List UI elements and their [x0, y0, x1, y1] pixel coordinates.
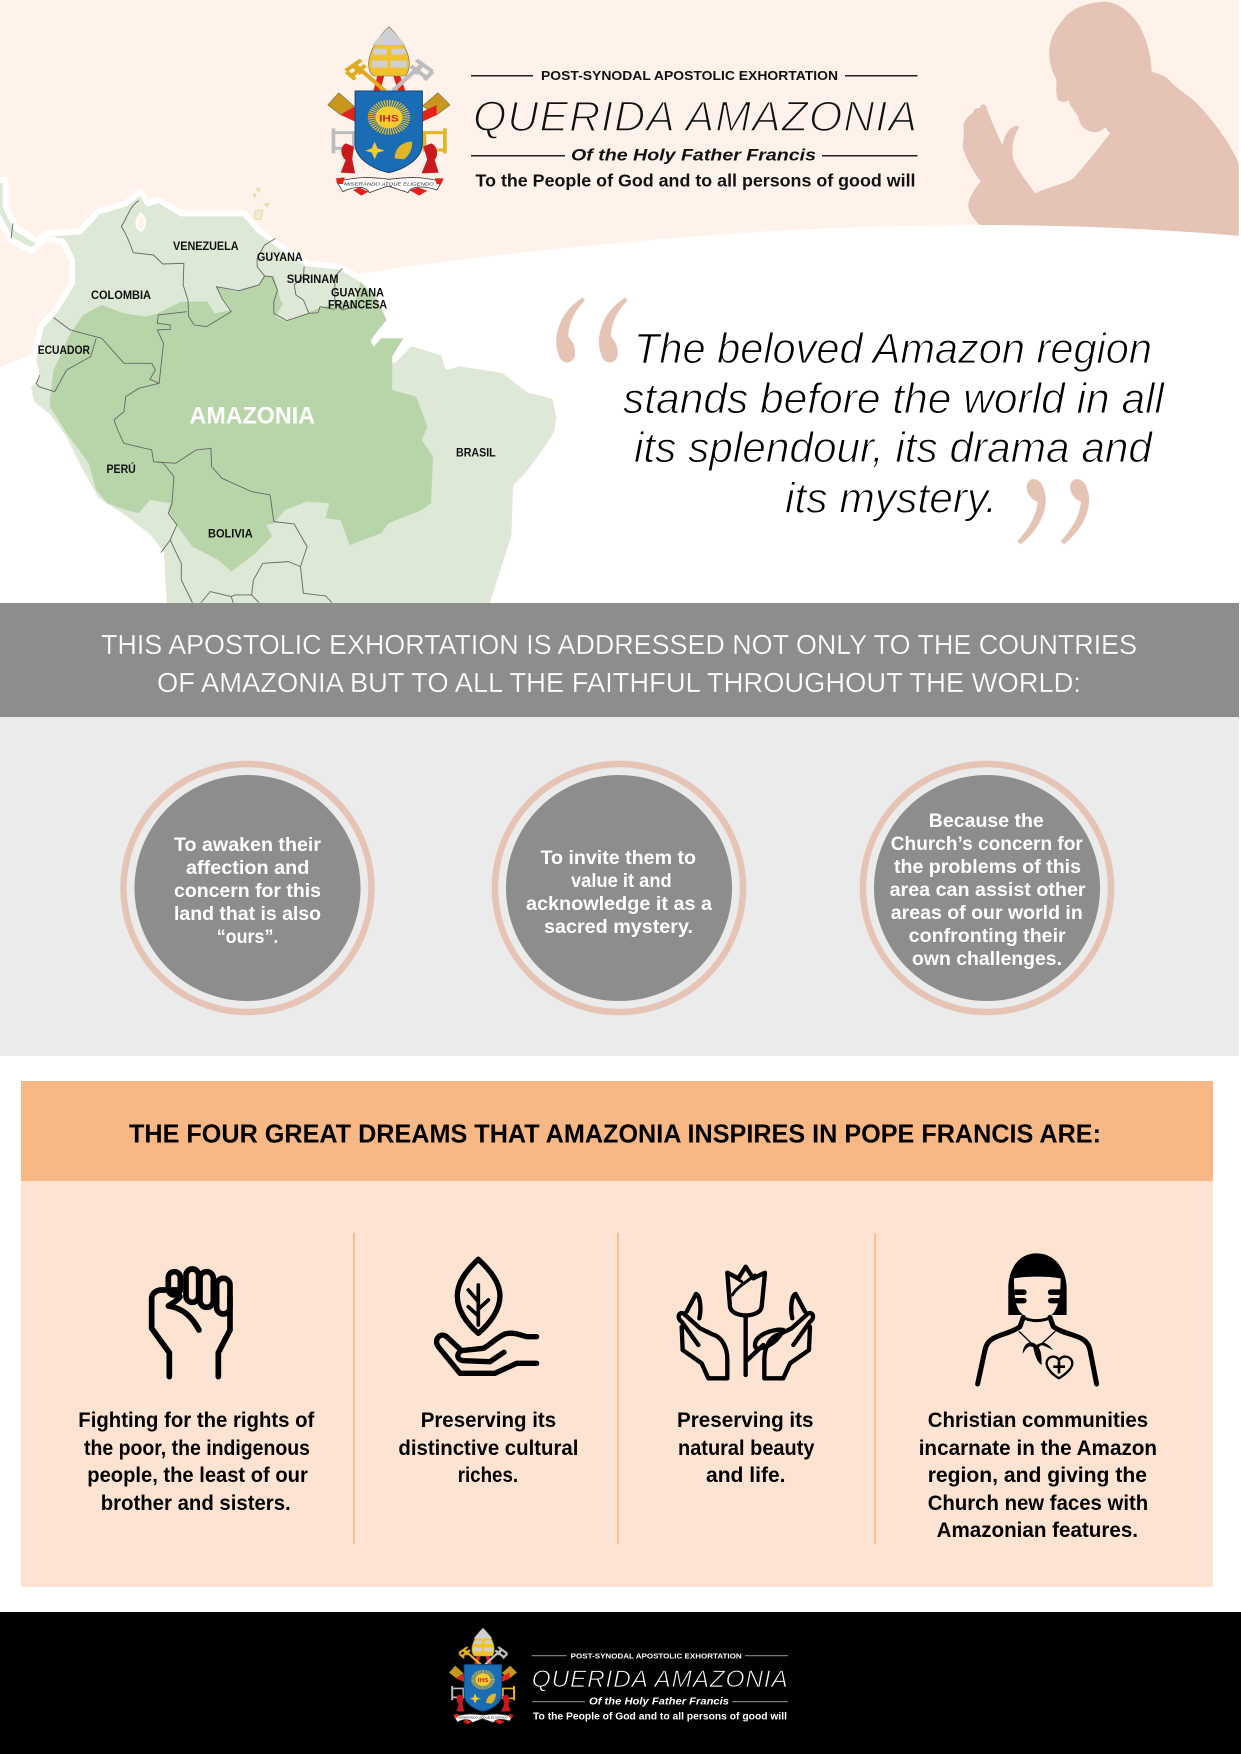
pope silhouette: [963, 2, 1239, 253]
map: islands: [253, 188, 269, 219]
panel: dreams: [21, 1181, 1213, 1587]
arms: gold key: [346, 60, 385, 91]
panel: reasons: [0, 717, 1239, 1056]
opening quotation mark: [556, 298, 628, 362]
dreams heading: [21, 1081, 1213, 1181]
footer title block: [532, 1651, 788, 1722]
arms: ribbons: [373, 75, 405, 91]
map labels: BOLIVIA: [208, 529, 253, 541]
circle: awaken affection: land that is also: [174, 903, 321, 925]
header title block: [471, 68, 918, 191]
footer band: [0, 1612, 1241, 1754]
circle: awaken affection: “ours”.: [217, 926, 278, 948]
dream text: rights of the poor: brother and sisters.: [101, 1491, 291, 1515]
map labels: SURINAM: [287, 274, 338, 286]
arms: silver cross: [333, 128, 354, 153]
circle: church concern: Because the: [929, 810, 1044, 832]
arms: gold cross: [424, 128, 445, 153]
arms: red tassels: [341, 143, 439, 173]
arms: tiara grey bands: [372, 27, 407, 68]
dream text: natural beauty: Preserving its: [677, 1408, 814, 1432]
dream text: cultural riches: [398, 1408, 578, 1487]
circle: church concern: own challenges.: [912, 948, 1062, 970]
map labels: COLOMBIA: [91, 290, 151, 302]
circle: church concern: the problems of this: [894, 856, 1081, 878]
arms: sun: [372, 103, 406, 131]
footer title block: POST-SYNODAL APOSTOLIC EXHORTATION: [571, 1651, 742, 1660]
arms: nard: [395, 142, 412, 159]
map labels: VENEZUELA: [173, 241, 239, 253]
arms: motto scroll: [336, 177, 444, 196]
icon: indigenous person: [978, 1253, 1097, 1384]
dream text: cultural riches: Preserving its: [421, 1408, 556, 1432]
map: Amazon biome: [50, 276, 433, 572]
header title block: QUERIDA AMAZONIA: [473, 93, 917, 141]
grey banner: THIS APOSTOLIC EXHORTATION IS ADDRESSED NOT ONLY TO THE COUNTRIES: [101, 629, 1137, 660]
dream text: christian communities: Church new faces with: [928, 1491, 1148, 1515]
grey banner: [0, 603, 1239, 717]
circle: church concern: areas of our world in: [891, 902, 1083, 924]
white swoosh background: [0, 225, 1241, 610]
footer coat of arms: [449, 1628, 517, 1724]
circle: church concern: confronting their: [909, 925, 1066, 947]
map labels: ECUADOR: [38, 345, 91, 357]
arms: shield: [355, 91, 422, 173]
circle: awaken affection: affection and: [186, 857, 309, 879]
map labels: BRASIL: [456, 448, 496, 460]
dream text: rights of the poor: [78, 1408, 315, 1515]
arms: motto scroll: MISERANDO ATQUE ELIGENDO: [344, 182, 435, 187]
header background: [0, 0, 1239, 400]
circle: church concern: area can assist other: [890, 879, 1086, 901]
map labels: GUYANA: [257, 252, 303, 264]
circle: sacred mystery: [495, 764, 743, 1012]
quote text: its mystery.: [785, 474, 997, 522]
arms: sun: IHS: [379, 114, 399, 124]
map labels: GUAYANA: [331, 288, 384, 300]
dream text: natural beauty: natural beauty: [678, 1436, 815, 1460]
dream text: natural beauty: [677, 1408, 815, 1487]
dream text: christian communities: Amazonian features.: [937, 1518, 1138, 1542]
map labels: [38, 241, 496, 541]
icon: leaf in hand: [437, 1259, 537, 1373]
column dividers: [354, 1233, 875, 1544]
quote text: stands before the world in all: [623, 375, 1165, 423]
map of Amazonia: [0, 180, 559, 617]
dream text: christian communities: Christian communities: [928, 1408, 1148, 1432]
map labels: FRANCESA: [328, 300, 387, 312]
header title block: Of the Holy Father Francis: [571, 146, 816, 165]
arms: tassels: [328, 93, 450, 115]
dreams heading: THE FOUR GREAT DREAMS THAT AMAZONIA INSPIRES IN POPE FRANCIS ARE:: [129, 1118, 1101, 1148]
circle: church concern: [863, 764, 1111, 1012]
map: country borders: [11, 201, 355, 603]
footer title block: To the People of God and to all persons of good will: [533, 1711, 787, 1722]
map: land: [0, 180, 559, 617]
arms: silver key: [393, 60, 433, 91]
dream text: cultural riches: riches.: [458, 1463, 518, 1487]
arms: tiara: [369, 27, 409, 76]
dream text: christian communities: region, and giving the: [928, 1463, 1147, 1487]
header title block: To the People of God and to all persons of good will: [476, 171, 916, 191]
map labels: AMAZONIA: [190, 402, 315, 430]
circle: sacred mystery: sacred mystery.: [544, 916, 693, 938]
arms: red cuffs: [341, 105, 437, 122]
dream text: rights of the poor: Fighting for the rights of: [78, 1408, 315, 1432]
circle: sacred mystery: To invite them to: [540, 847, 696, 869]
circle: sacred mystery: acknowledge it as a: [526, 893, 712, 915]
quote text: [623, 325, 1165, 522]
coat of arms: [328, 27, 450, 196]
icon: tulip in hands: [679, 1267, 813, 1378]
circle: awaken affection: To awaken their: [174, 834, 321, 856]
closing quotation mark: [1017, 479, 1089, 544]
icon: fist: [152, 1269, 230, 1377]
dream text: christian communities: [919, 1408, 1157, 1542]
dream text: rights of the poor: people, the least of our: [87, 1463, 308, 1487]
dream text: natural beauty: and life.: [706, 1463, 786, 1487]
footer title block: Of the Holy Father Francis: [589, 1696, 729, 1707]
dream text: rights of the poor: the poor, the indigenous: [84, 1436, 310, 1460]
quote text: The beloved Amazon region: [634, 325, 1152, 373]
header title block: POST-SYNODAL APOSTOLIC EXHORTATION: [541, 68, 838, 83]
footer title block: QUERIDA AMAZONIA: [532, 1666, 788, 1693]
circle: sacred mystery: value it and: [571, 870, 672, 892]
map: lake: [136, 213, 145, 231]
arms: star: [365, 142, 385, 159]
circle: awaken affection: concern for this: [174, 880, 321, 902]
dream text: cultural riches: distinctive cultural: [398, 1436, 578, 1460]
map labels: PERÚ: [106, 463, 136, 476]
circle: church concern: Church’s concern for: [891, 833, 1083, 855]
quote text: its splendour, its drama and: [634, 424, 1154, 472]
grey banner: OF AMAZONIA BUT TO ALL THE FAITHFUL THROUGHOUT THE WORLD:: [157, 667, 1081, 698]
dream text: christian communities: incarnate in the Amazon: [919, 1436, 1157, 1460]
circle: awaken affection: [124, 764, 372, 1012]
